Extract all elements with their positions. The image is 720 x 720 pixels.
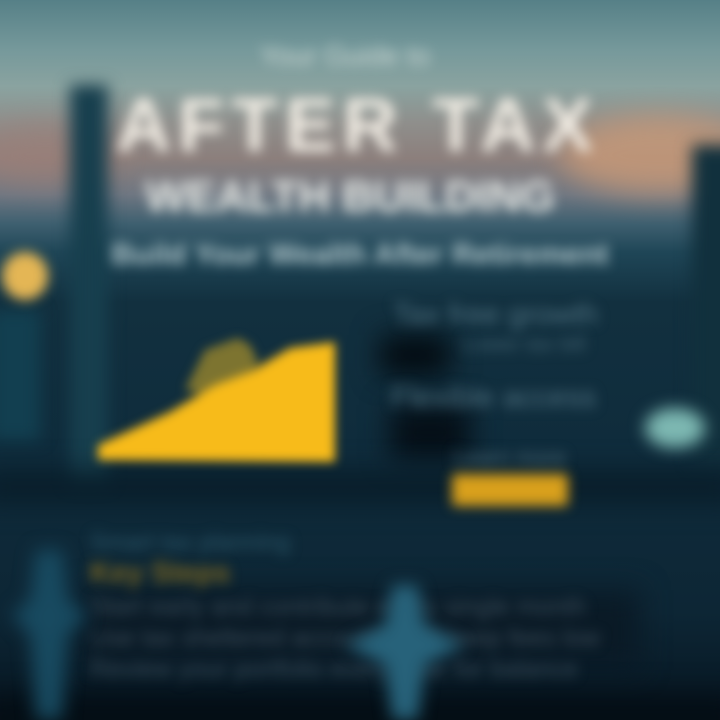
list item one: Tax free growth [393, 298, 598, 331]
body text: Use tax sheltered accounts and keep fees low [90, 624, 600, 652]
background: left city tower [70, 85, 108, 485]
section heading: Smart tax planning [90, 529, 290, 556]
background: warm sunset glow [560, 115, 720, 195]
body text: Review your portfolio every year for balance [90, 655, 578, 683]
background: upper central shadow [380, 335, 450, 375]
title: AFTER TAX [116, 83, 600, 168]
background: rosy sunset glow [0, 125, 120, 185]
label above button: Learn more [454, 445, 566, 470]
tagline: Build Your Wealth After Retirement [111, 238, 609, 271]
background: body text shade [80, 590, 640, 670]
chart: main yellow area [98, 342, 335, 462]
background: right city tower [692, 145, 720, 465]
background: bottom dark band [0, 695, 720, 720]
body text [90, 593, 600, 683]
icon: left cross-shaped tower [10, 544, 90, 720]
body text: Start early and contribute every single month [90, 593, 586, 621]
chart: secondary area [185, 338, 258, 400]
eyebrow text: Your Guide to [260, 40, 430, 71]
background: lower central shadow [390, 405, 470, 460]
icon: cross-shaped tower [344, 576, 466, 720]
icon: pale teal glow [645, 408, 705, 448]
button [452, 474, 568, 506]
panel: right-side list [388, 298, 598, 414]
background: lower dark band [0, 472, 720, 502]
section subheading: Key Steps [90, 557, 230, 589]
icon: gold sun [2, 252, 48, 300]
subtitle: WEALTH BUILDING [145, 172, 555, 221]
list item three: Flexible access [391, 381, 596, 414]
list item two: Lower tax bill [463, 333, 586, 356]
background: left skyline block [0, 310, 40, 440]
